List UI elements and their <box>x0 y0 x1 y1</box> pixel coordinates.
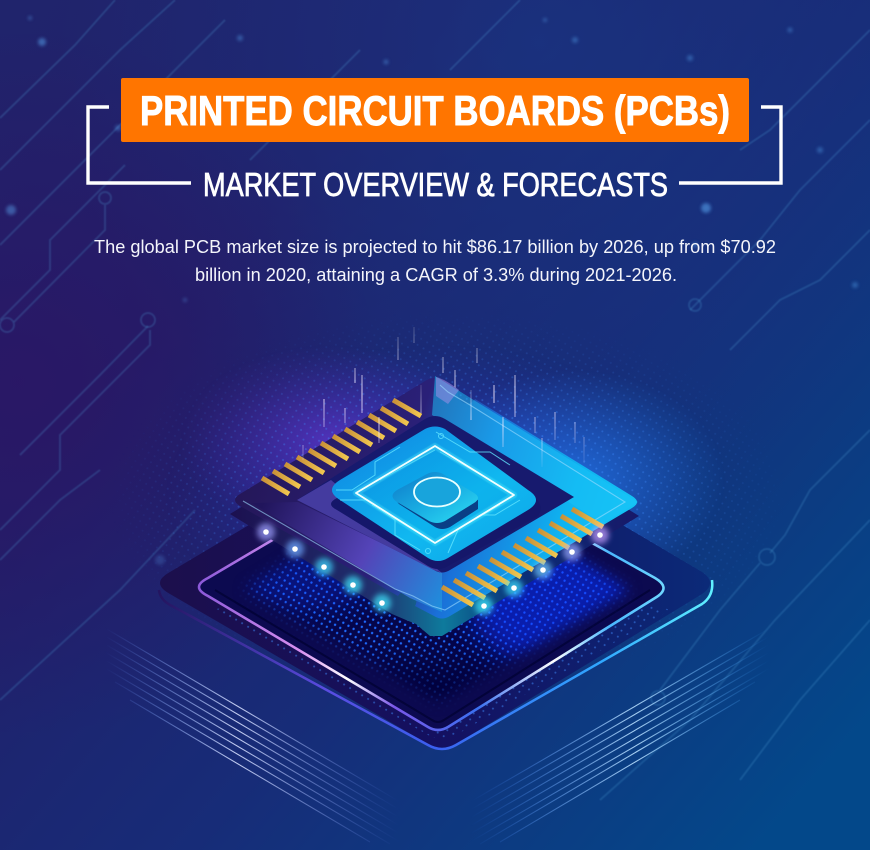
gold pins left <box>262 400 421 494</box>
neon square <box>356 446 514 543</box>
title banner <box>121 78 749 142</box>
chip top plate <box>235 378 637 618</box>
die circle <box>414 478 460 506</box>
dark recess <box>297 416 574 572</box>
lower left plate strip <box>252 502 442 612</box>
central die <box>392 472 478 529</box>
inner blue plate <box>332 426 536 561</box>
LED lights <box>257 523 609 615</box>
background bokeh lights <box>6 16 858 565</box>
chip module <box>230 376 639 636</box>
summary text <box>94 237 776 285</box>
chip glow and halftone halo <box>135 326 761 638</box>
lower circuit board <box>158 526 714 750</box>
recess purple corner <box>297 480 442 573</box>
outer board edge highlight <box>159 580 712 749</box>
neon square core line <box>356 446 514 543</box>
summary text: The global PCB market size is projected to hit $86.17 billion by 2026, up from $70.92 <box>94 237 776 257</box>
circuit hatch lines under the board <box>105 628 770 844</box>
edge traces on plate <box>243 385 625 610</box>
rising light beams <box>324 327 584 463</box>
title text: PRINTED CIRCUIT BOARDS (PCBs) <box>140 87 730 134</box>
halftone dot field <box>240 550 634 706</box>
outer band dots <box>210 600 670 739</box>
subtitle: MARKET OVERVIEW & FORECASTS <box>203 166 668 203</box>
inner plate circuit traces <box>336 432 520 554</box>
inner plate shadow <box>331 438 541 569</box>
gold pins right <box>442 509 603 605</box>
dark inner line <box>215 590 650 722</box>
chip side wall <box>230 389 639 636</box>
summary text: billion in 2020, attaining a CAGR of 3.3% during 2021-2026. <box>195 265 677 285</box>
light beams in front of chip <box>303 385 542 467</box>
title bracket frame <box>88 107 781 183</box>
inner board plate <box>199 450 664 730</box>
top right cyan translucent edge <box>432 376 638 524</box>
purple corner highlight <box>436 377 459 404</box>
